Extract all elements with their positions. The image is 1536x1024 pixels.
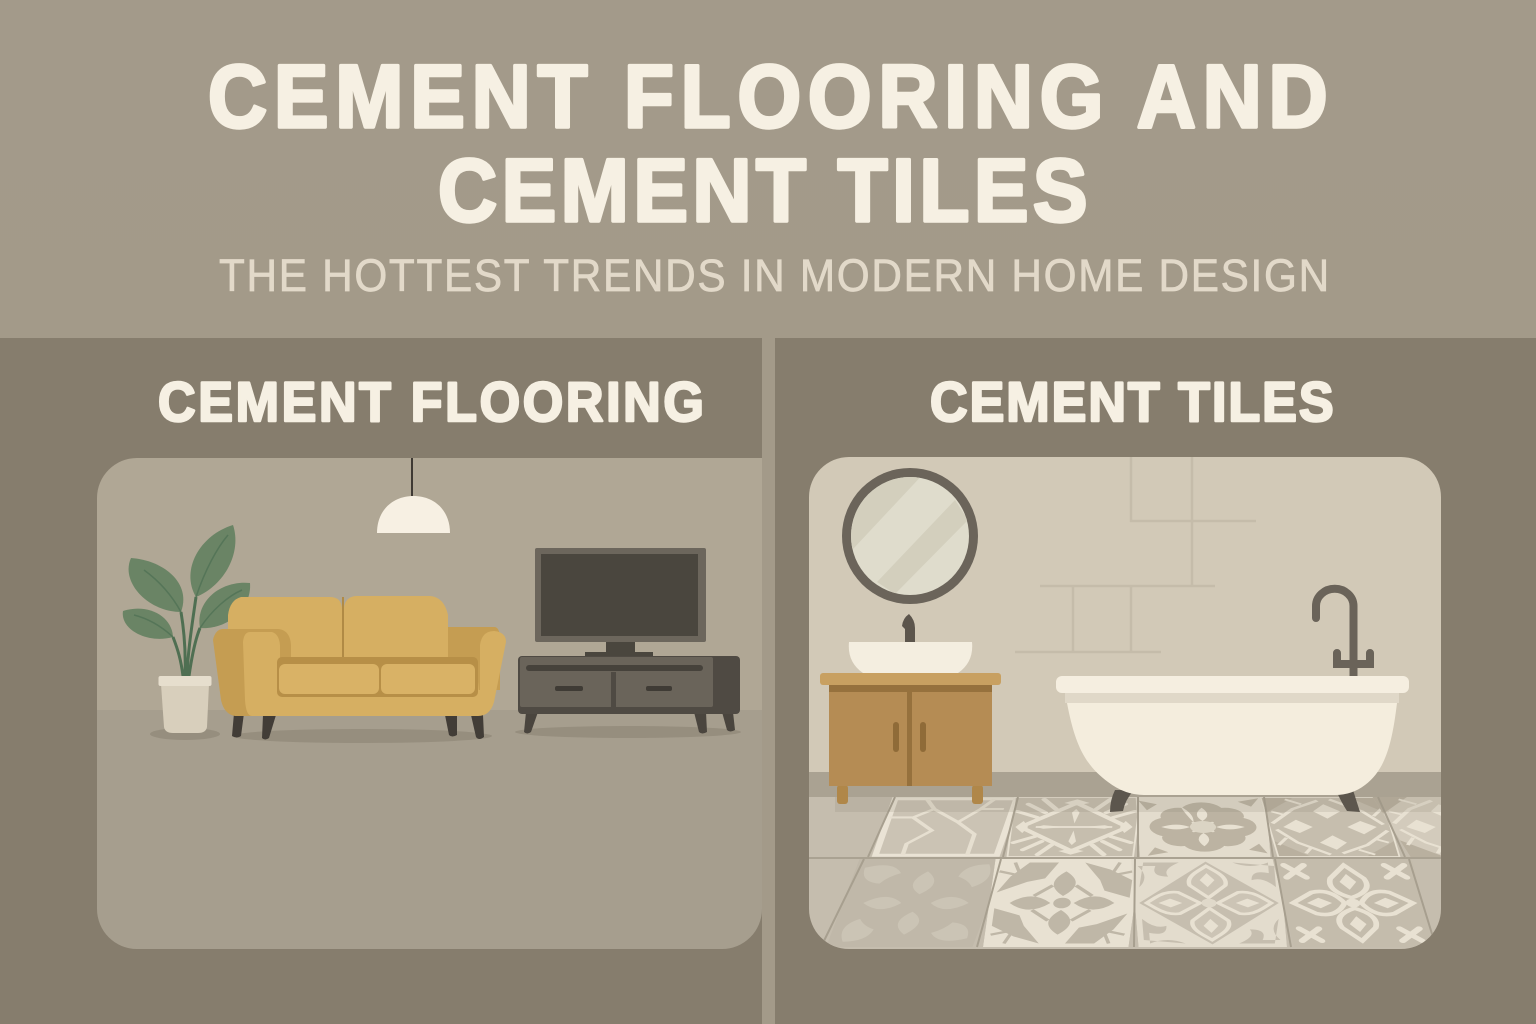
heading: cement flooring: CEMENT FLOORING: [158, 371, 704, 433]
tub faucet: [1316, 589, 1370, 676]
tub feet: [1110, 790, 1360, 812]
bathroom wall: [809, 457, 1441, 772]
floor shadow band: [835, 797, 1441, 812]
bathroom scene: [809, 457, 1441, 949]
television: [535, 548, 706, 657]
title: [208, 48, 1328, 241]
patterned floor tiles: [809, 797, 1441, 948]
tile row 2: [826, 859, 1434, 947]
heading: cement tiles: CEMENT TILES: [930, 371, 1334, 433]
panel: cement flooring: [0, 338, 762, 1024]
baseboard: [809, 772, 1441, 797]
tv console: [515, 656, 741, 738]
sink faucet: [902, 614, 915, 642]
title: CEMENT TILES: [438, 142, 1088, 241]
bathtub: [1056, 589, 1409, 812]
wall tile lines: [1015, 457, 1256, 652]
title: CEMENT FLOORING AND: [208, 48, 1328, 147]
round mirror: [840, 468, 978, 604]
vanity cabinet: [820, 673, 1001, 804]
plant: [123, 525, 250, 740]
subtitle: THE HOTTEST TRENDS IN MODERN HOME DESIGN: [219, 251, 1329, 301]
plant pot: [161, 684, 209, 733]
cement floor: [97, 710, 762, 949]
wall: [97, 458, 762, 710]
sink bowl: [849, 642, 972, 673]
header background: [0, 0, 1536, 338]
floor: [809, 797, 1441, 949]
panel: cement tiles: [775, 338, 1536, 1024]
living room scene: [97, 458, 762, 949]
tile row 1: [872, 797, 1441, 857]
sofa: [213, 596, 506, 743]
pendant lamp: [377, 458, 450, 533]
